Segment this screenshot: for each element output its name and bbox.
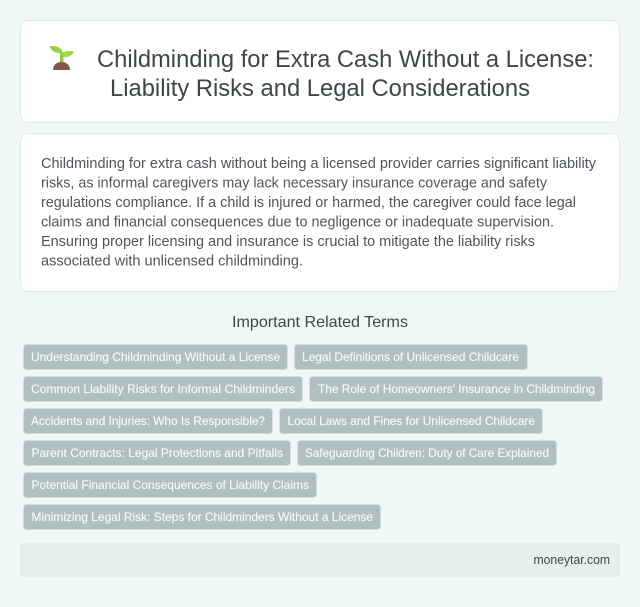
text block: summary paragraph: associated with unlicensed childminding.	[41, 254, 303, 270]
title: Childminding for Extra Cash Without a License:	[97, 46, 594, 73]
tag: homeowners insurance: The Role of Homeowners' Insurance in Childminding	[318, 382, 595, 396]
tag: accidents and injuries: Accidents and Injuries: Who Is Responsible?	[31, 414, 265, 428]
tag: understanding childminding	[24, 344, 288, 370]
panel: header	[20, 20, 620, 122]
text block: summary paragraph: regulations compliance. If a child is injured or harmed, the caregiver could face legal	[41, 195, 576, 211]
tag: minimizing legal risk	[24, 504, 380, 530]
tag: safeguarding children: Safeguarding Children: Duty of Care Explained	[305, 446, 549, 460]
tag: common liability risks	[24, 376, 302, 402]
tag: financial consequences	[24, 472, 316, 498]
panel: summary	[20, 134, 620, 292]
tag: parent contracts	[24, 440, 290, 466]
tag: common liability risks: Common Liability Risks for Informal Childminders	[31, 382, 295, 396]
tag: minimizing legal risk: Minimizing Legal Risk: Steps for Childminders Without a License	[32, 510, 373, 524]
footer	[20, 543, 620, 577]
tag: local laws	[280, 408, 542, 434]
tag: accidents and injuries	[24, 408, 272, 434]
tag: parent contracts: Parent Contracts: Legal Protections and Pitfalls	[32, 446, 283, 460]
tag: legal definitions	[294, 344, 528, 370]
tag: financial consequences: Potential Financial Consequences of Liability Claims	[32, 478, 309, 492]
tag: legal definitions: Legal Definitions of Unlicensed Childcare	[302, 350, 519, 364]
text block: summary paragraph	[41, 156, 597, 270]
tag: understanding childminding: Understanding Childminding Without a License	[31, 350, 280, 364]
tag: local laws: Local Laws and Fines for Unlicensed Childcare	[288, 414, 535, 428]
icon: sprout	[50, 46, 74, 70]
title: Liability Risks and Legal Considerations	[110, 75, 530, 102]
title	[97, 46, 594, 102]
tag: safeguarding children	[298, 440, 556, 466]
tag: homeowners insurance	[310, 376, 602, 402]
footer source text: moneytar.com	[534, 552, 610, 567]
text block: summary paragraph: risks, as informal caregivers may lack necessary insurance coverage and safety	[41, 176, 548, 192]
text block: summary paragraph: Childminding for extra cash without being a licensed provider carries significant liability	[41, 156, 597, 172]
text block: summary paragraph: Ensuring proper licensing and insurance is crucial to mitigate the liability risks	[41, 234, 535, 250]
panel: related term tags	[24, 344, 602, 530]
text block: summary paragraph: claims and financial consequences due to negligence or inadequate supervision.	[41, 214, 554, 230]
heading: related terms: Important Related Terms	[232, 314, 408, 331]
